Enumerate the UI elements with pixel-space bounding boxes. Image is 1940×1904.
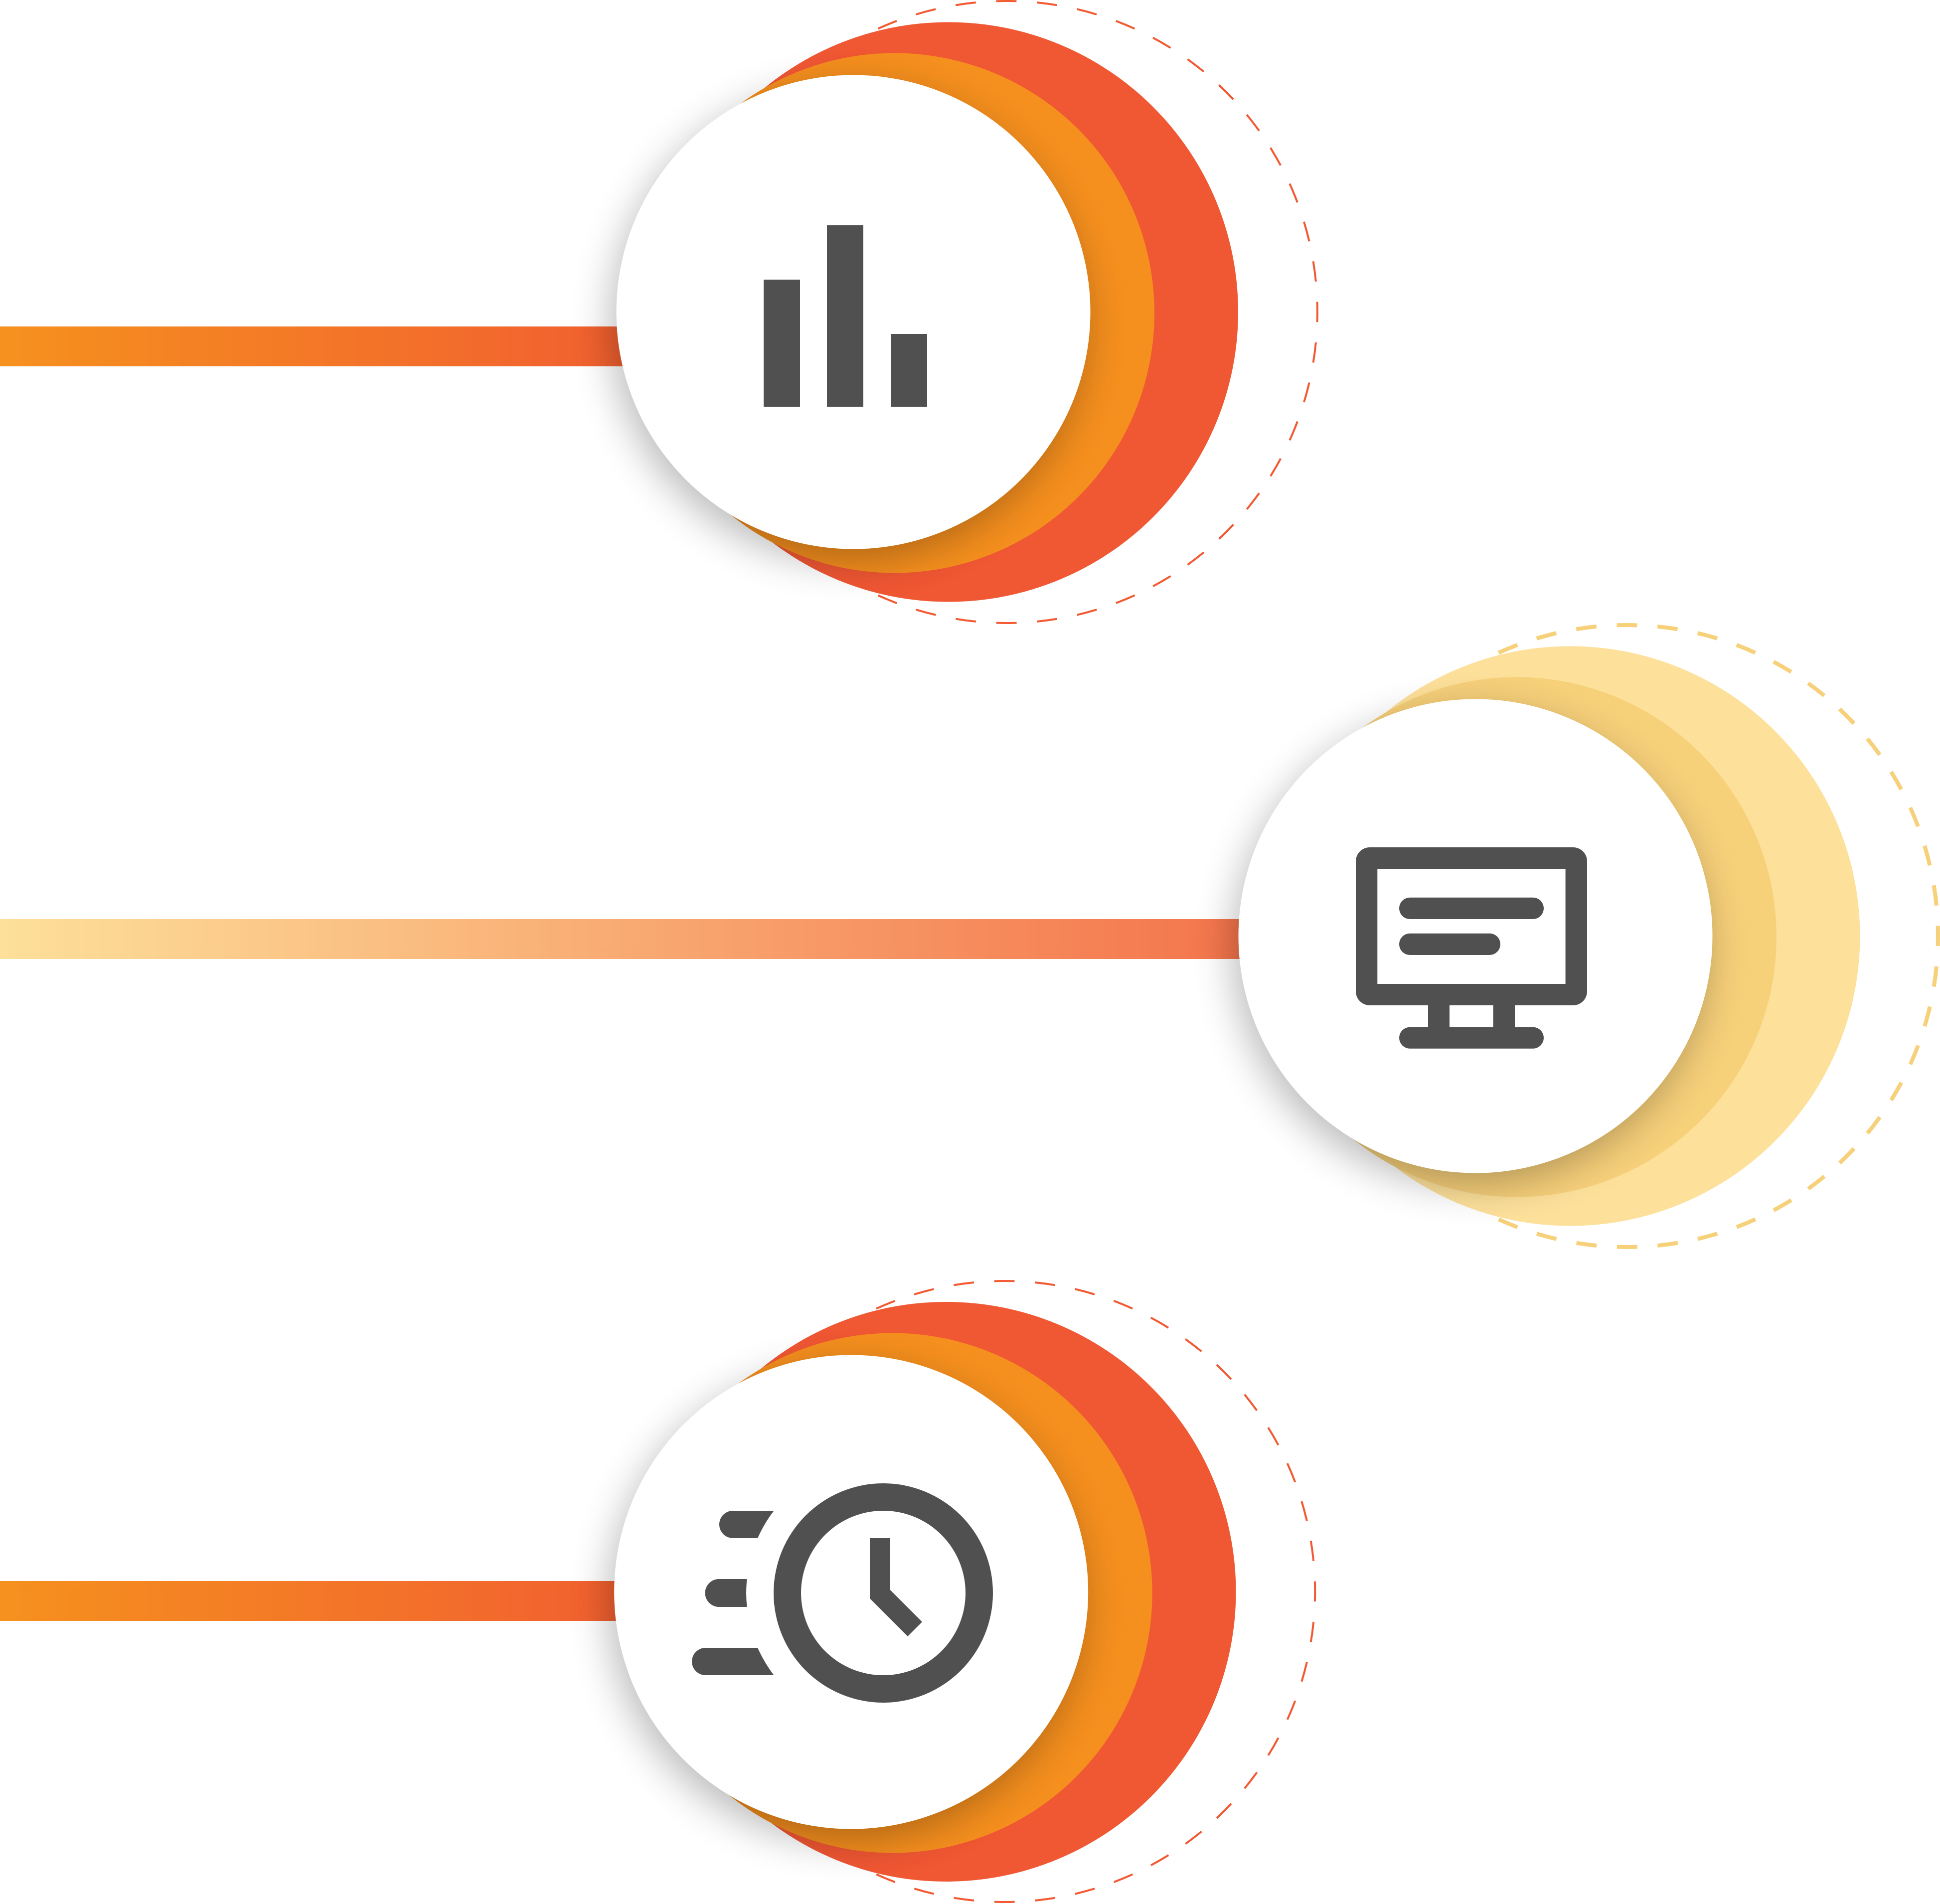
white disc 3 — [614, 1355, 1088, 1829]
white disc shadow 2 — [1233, 712, 1708, 1185]
dashed arc 3 — [876, 1281, 1315, 1902]
white disc shadow 3 — [609, 1368, 1083, 1841]
red circle 3 — [656, 1302, 1236, 1882]
icon: bar chart — [764, 225, 927, 407]
white disc shadow 1 — [611, 88, 1086, 561]
orange circle 3 — [633, 1333, 1152, 1853]
icon: fast clock — [692, 1483, 993, 1703]
white disc 1 — [616, 75, 1091, 549]
connector line 3 — [0, 1581, 648, 1621]
orange circle 1 — [635, 53, 1154, 573]
dashed arc 2 — [1498, 625, 1938, 1247]
connector line 2 — [0, 919, 1271, 959]
step 2: monitor node — [0, 625, 1938, 1247]
white disc 2 — [1238, 699, 1713, 1173]
step 3: clock node — [0, 1281, 1315, 1902]
amber circle — [1257, 677, 1777, 1197]
red circle 1 — [658, 22, 1238, 602]
pale yellow circle — [1280, 646, 1860, 1226]
dashed arc 1 — [878, 1, 1317, 623]
step 1: bar chart node — [0, 1, 1317, 623]
icon: monitor — [1356, 847, 1587, 1049]
connector line 1 — [0, 326, 648, 366]
